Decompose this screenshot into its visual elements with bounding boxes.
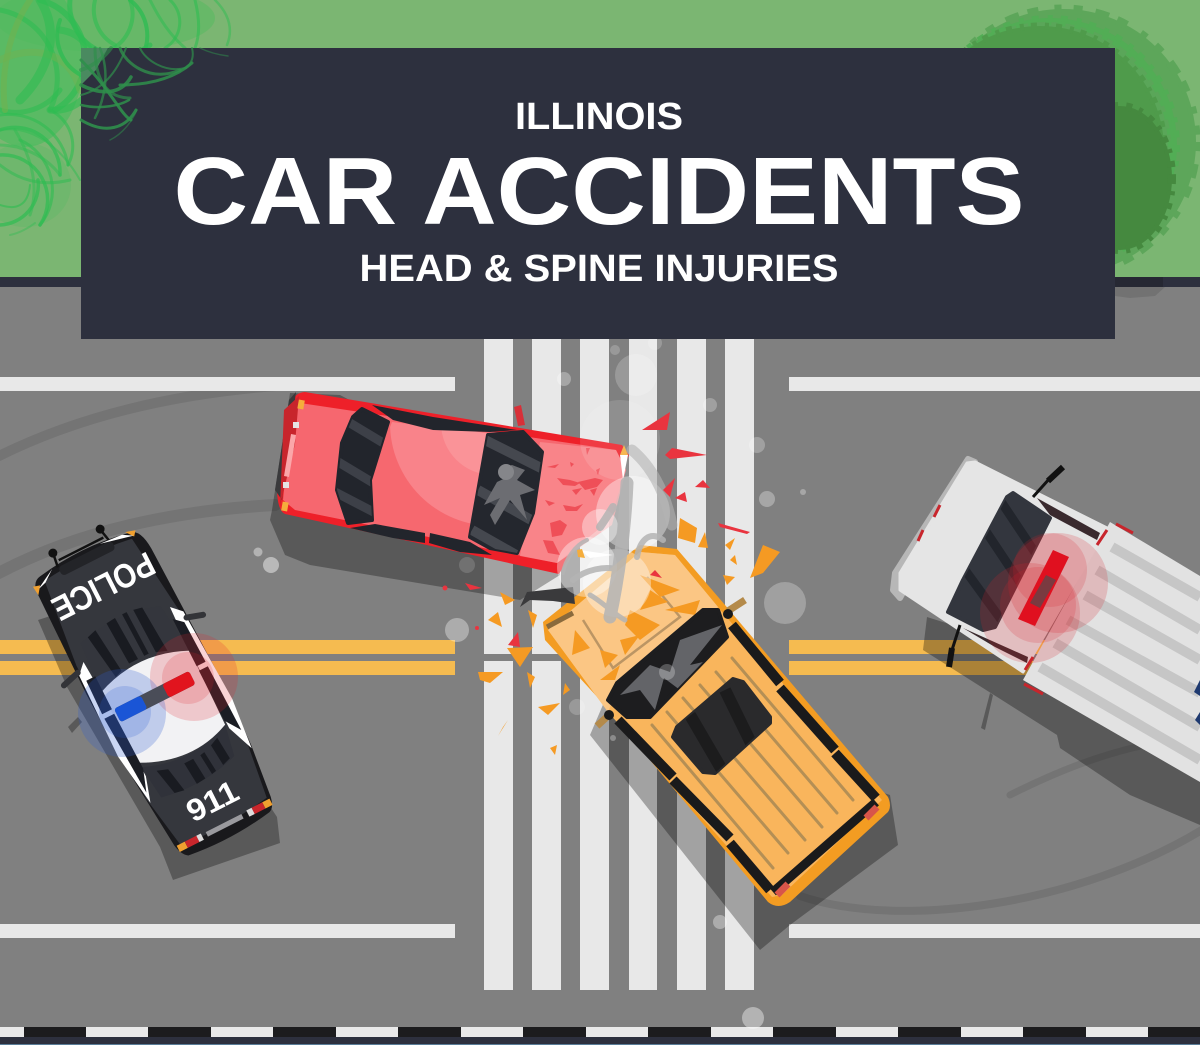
red car: [275, 392, 629, 574]
suv windshield: [608, 610, 727, 717]
dust bubbles: [254, 336, 806, 1029]
tree shadow on kerb: [1115, 277, 1165, 298]
suv roof ribs: [652, 658, 853, 868]
truck side windows: [963, 498, 1100, 663]
truck mirrors: [949, 467, 1063, 667]
lane lines and crosswalk: [0, 339, 1200, 990]
headlights: [29, 527, 142, 596]
suv tail lights: [777, 807, 877, 895]
truck red details: [918, 505, 1133, 694]
road kerb top: [0, 277, 1200, 287]
red car roof: [390, 422, 487, 524]
crash smoke: [557, 400, 672, 620]
truck cab: [900, 462, 1107, 672]
red car body: [277, 392, 629, 574]
truck cab edge: [893, 459, 975, 598]
side windows: [78, 614, 247, 794]
crosswalk stripes: [484, 339, 754, 990]
red car side windows: [350, 405, 517, 555]
truck bed: [1023, 522, 1200, 782]
suv bonnet outline: [583, 577, 680, 668]
suv bonnet damage: [572, 575, 700, 680]
red car faded nose: [520, 442, 626, 563]
mirrors: [62, 610, 203, 685]
police car: [6, 501, 298, 873]
orange pieces: [478, 518, 780, 755]
yellow suv: [520, 545, 890, 906]
truck bed ribs: [1040, 547, 1200, 760]
suv faded bonnet: [548, 552, 718, 712]
main title: CAR ACCIDENTS: [174, 138, 1024, 245]
police light bar and glow: [78, 633, 238, 757]
suv mirrors: [597, 600, 745, 726]
suv torn bumper: [520, 587, 575, 627]
suv body: [543, 545, 890, 906]
suv side windows: [618, 625, 876, 892]
suv sunroof: [673, 679, 770, 775]
yellow centre lines: [0, 640, 1200, 675]
white roof: [97, 640, 231, 776]
911 lettering: 911: [180, 773, 244, 829]
red car mirror: [514, 405, 525, 426]
spoiler and nubs: [47, 523, 116, 577]
rear lights: [177, 799, 273, 852]
shadows of the vehicles: [38, 393, 1200, 950]
title panel: [81, 48, 1115, 339]
kerb bottom with dashes: [0, 1027, 1200, 1045]
white door strips: [68, 601, 258, 807]
rear window: [141, 725, 243, 803]
bush top left: [0, 0, 230, 235]
red car rear window: [335, 409, 395, 523]
grass verge: [0, 0, 1200, 277]
truck light bar and glow: [980, 533, 1108, 663]
white truck: [893, 459, 1200, 782]
red car crash headlight: [620, 455, 628, 480]
windshield: [74, 594, 190, 695]
red car damaged bonnet: [543, 448, 603, 555]
red pieces: [442, 412, 750, 647]
police lettering: POLICE: [46, 544, 161, 628]
tree top right: [964, 4, 1200, 265]
police body: [28, 521, 287, 866]
bush overlap on panel: [81, 48, 228, 140]
white stop lines: [0, 377, 1200, 938]
truck blue marks: [1194, 680, 1200, 725]
red car windshield with cracks: [470, 432, 545, 560]
truck windshield: [948, 493, 1050, 630]
rear lights red car: [280, 396, 305, 511]
title kicker: ILLINOIS: [515, 96, 683, 138]
skid marks: [0, 385, 1200, 911]
subtitle: HEAD & SPINE INJURIES: [360, 248, 838, 290]
flying debris: [442, 412, 780, 755]
